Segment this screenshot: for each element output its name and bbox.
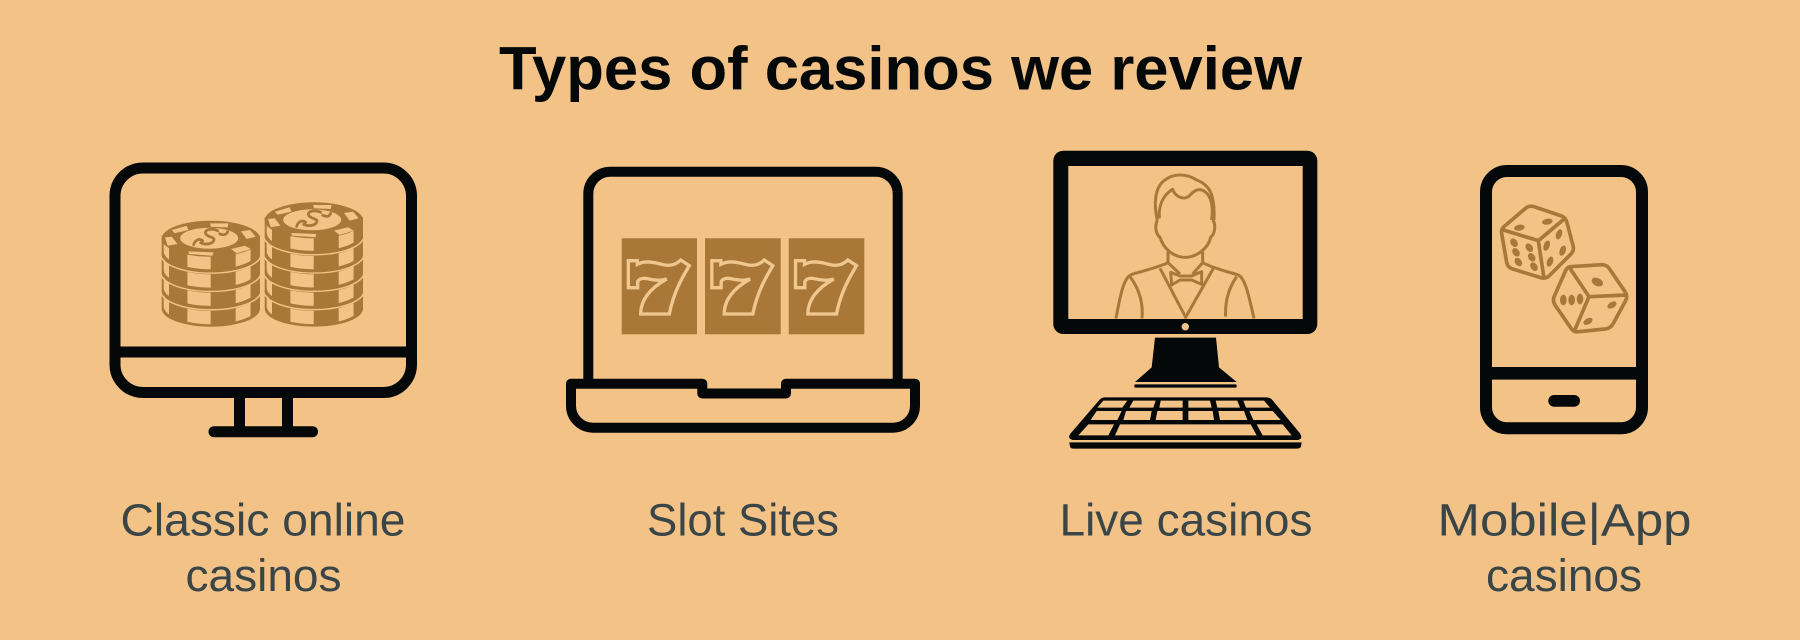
icon: desktop monitor bbox=[115, 168, 412, 432]
title: Types of casinos we review bbox=[499, 34, 1303, 102]
label: classic online casinos: Classic online bbox=[120, 495, 406, 546]
icon: poker chip stacks bbox=[161, 202, 364, 327]
panel: slot sites bbox=[571, 172, 915, 546]
icon: dice bbox=[1502, 206, 1627, 332]
icon: slot reels 777 bbox=[622, 238, 864, 334]
panel: mobile and app casinos bbox=[1438, 171, 1692, 601]
icon: smartphone bbox=[1486, 171, 1642, 428]
icon: casino dealer bbox=[1116, 175, 1254, 318]
icon: desktop computer with keyboard bbox=[1053, 151, 1317, 449]
label: classic online casinos: casinos bbox=[186, 550, 342, 601]
label: mobile and app casinos: Mobile|App bbox=[1438, 495, 1692, 546]
label: slot sites: Slot Sites bbox=[647, 495, 839, 546]
panel: classic online casinos bbox=[115, 168, 412, 601]
label: classic online casinos bbox=[120, 495, 406, 601]
panel: live casinos bbox=[1053, 151, 1317, 546]
label: mobile and app casinos: casinos bbox=[1486, 550, 1642, 601]
icon: laptop bbox=[571, 172, 915, 428]
label: mobile and app casinos bbox=[1438, 495, 1692, 601]
label: live casinos: Live casinos bbox=[1060, 495, 1312, 546]
